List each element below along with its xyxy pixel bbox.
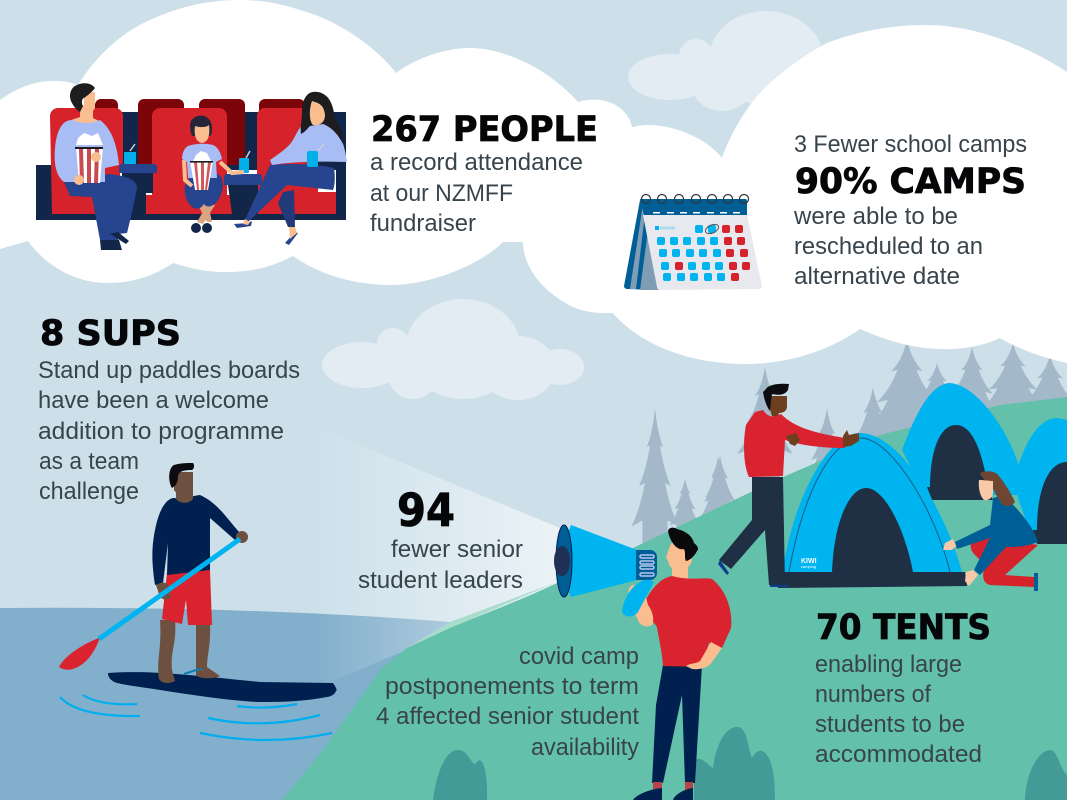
illustration: front tent: KIWI <box>801 558 817 565</box>
stat: 267 people: a record attendance <box>370 149 583 176</box>
stat: 8 SUPs: as a team <box>39 448 139 475</box>
pale cloud: top right <box>628 11 823 111</box>
stat: 94 fewer senior student leaders: fewer senior <box>391 536 523 563</box>
stat: 267 people: 267 PEOPLE <box>371 110 598 150</box>
stat: 8 SUPs: have been a welcome <box>38 387 269 414</box>
text: covid postponements <box>376 643 639 761</box>
illustration: man with red hoodie <box>718 384 859 587</box>
illustration: front tent: camping <box>801 564 816 569</box>
stat: 90% camps <box>793 131 1027 290</box>
stat: 8 SUPs: challenge <box>39 478 139 505</box>
bushes <box>433 727 1067 800</box>
stat: 8 SUPs <box>38 314 300 505</box>
megaphone sound beam <box>300 420 560 690</box>
stat: 70 tents: numbers of <box>815 681 931 708</box>
illustration: woman pegging tent <box>943 471 1038 591</box>
stat: 70 tents: accommodated <box>815 741 982 768</box>
text: covid postponements: availability <box>531 734 639 761</box>
illustration: man with megaphone <box>554 525 731 800</box>
stat: 8 SUPs: 8 SUPS <box>40 314 181 354</box>
stat: 70 tents: students to be <box>815 711 965 738</box>
stat: 8 SUPs: addition to programme <box>38 418 284 445</box>
stat: 267 people: fundraiser <box>370 210 476 237</box>
light beam edge on hill <box>407 582 557 648</box>
stat: 70 tents: 70 TENTS <box>816 608 991 648</box>
water <box>0 608 450 800</box>
woman <box>278 190 295 227</box>
stat: 8 SUPs: Stand up paddles boards <box>38 357 300 384</box>
tree line <box>631 340 1067 558</box>
stat: 94 fewer senior student leaders <box>358 484 523 594</box>
pale cloud: middle <box>322 299 584 400</box>
illustration: paddle boarder <box>59 463 337 740</box>
stat: 90% camps: 90% CAMPS <box>795 162 1026 202</box>
text: covid postponements: postponements to term <box>385 673 639 700</box>
stat: 70 tents: enabling large <box>815 651 962 678</box>
icon: calendar <box>624 194 762 290</box>
illustration: family in cinema seats <box>36 83 347 250</box>
stat: 267 people <box>370 110 598 237</box>
stat: 90% camps: 3 Fewer school camps <box>794 131 1027 158</box>
stat: 70 tents <box>815 608 991 768</box>
stat: 94 fewer senior student leaders: 94 <box>397 484 455 537</box>
illustration: front tent <box>778 433 967 588</box>
stat: 267 people: at our NZMFF <box>370 180 513 207</box>
text: covid postponements: covid camp <box>519 643 639 670</box>
stat: 90% camps: rescheduled to an <box>794 233 983 260</box>
illustration: back tents <box>902 383 1067 544</box>
green hill <box>282 397 1067 800</box>
white clouds <box>0 0 1067 364</box>
boy <box>197 203 215 224</box>
stat: 90% camps: alternative date <box>794 263 960 290</box>
stat: 94 fewer senior student leaders: student leaders <box>358 567 523 594</box>
man <box>64 174 137 240</box>
text: covid postponements: 4 affected senior student <box>376 703 639 730</box>
stat: 90% camps: were able to be <box>793 203 958 230</box>
